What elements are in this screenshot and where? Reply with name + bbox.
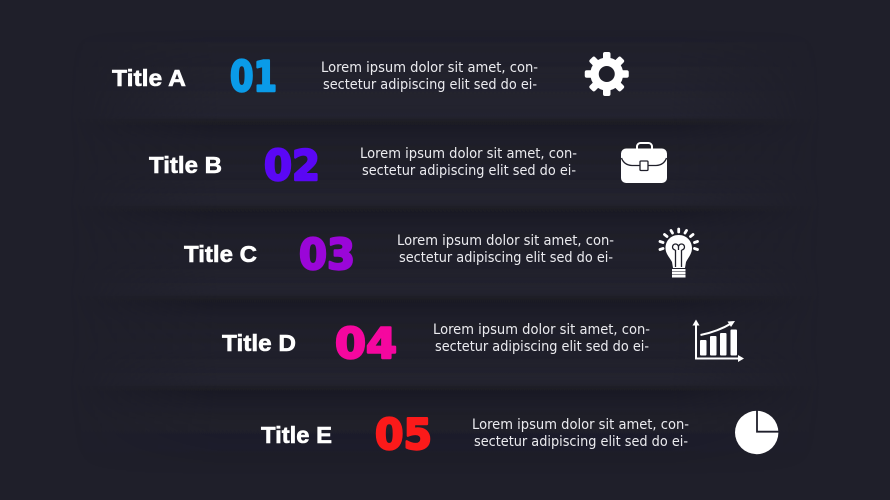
title D: Title D [222, 330, 296, 356]
title C: Title C [184, 241, 257, 267]
row: Title C [184, 229, 698, 279]
description A: sectetur adipiscing elit sed do ei- [323, 77, 537, 93]
background bands [70, 30, 820, 475]
icon: light bulb [660, 229, 698, 278]
icon: gear [585, 52, 629, 96]
description E: Lorem ipsum dolor sit amet, con- [472, 417, 689, 433]
description E: sectetur adipiscing elit sed do ei- [474, 434, 688, 450]
description B: Lorem ipsum dolor sit amet, con- [360, 146, 577, 162]
row: Title B [149, 141, 667, 190]
number 01: 01 [230, 52, 277, 101]
number 04: 04 [335, 319, 397, 368]
icon: pie chart [735, 409, 780, 454]
icon: bar chart [692, 320, 744, 362]
title E: Title E [261, 422, 332, 448]
description B: sectetur adipiscing elit sed do ei- [362, 163, 576, 179]
number 02: 02 [264, 141, 320, 190]
number 03: 03 [299, 230, 355, 279]
row: Title D [222, 319, 744, 368]
description D: sectetur adipiscing elit sed do ei- [435, 339, 649, 355]
row: Title E [261, 409, 780, 459]
icon: briefcase [621, 143, 667, 183]
description C: sectetur adipiscing elit sed do ei- [399, 250, 613, 266]
number 05: 05 [375, 410, 432, 459]
description A: Lorem ipsum dolor sit amet, con- [321, 60, 538, 76]
description C: Lorem ipsum dolor sit amet, con- [397, 233, 614, 249]
title A: Title A [112, 65, 186, 91]
row: Title A [112, 52, 629, 101]
description D: Lorem ipsum dolor sit amet, con- [433, 322, 650, 338]
title B: Title B [149, 152, 222, 178]
